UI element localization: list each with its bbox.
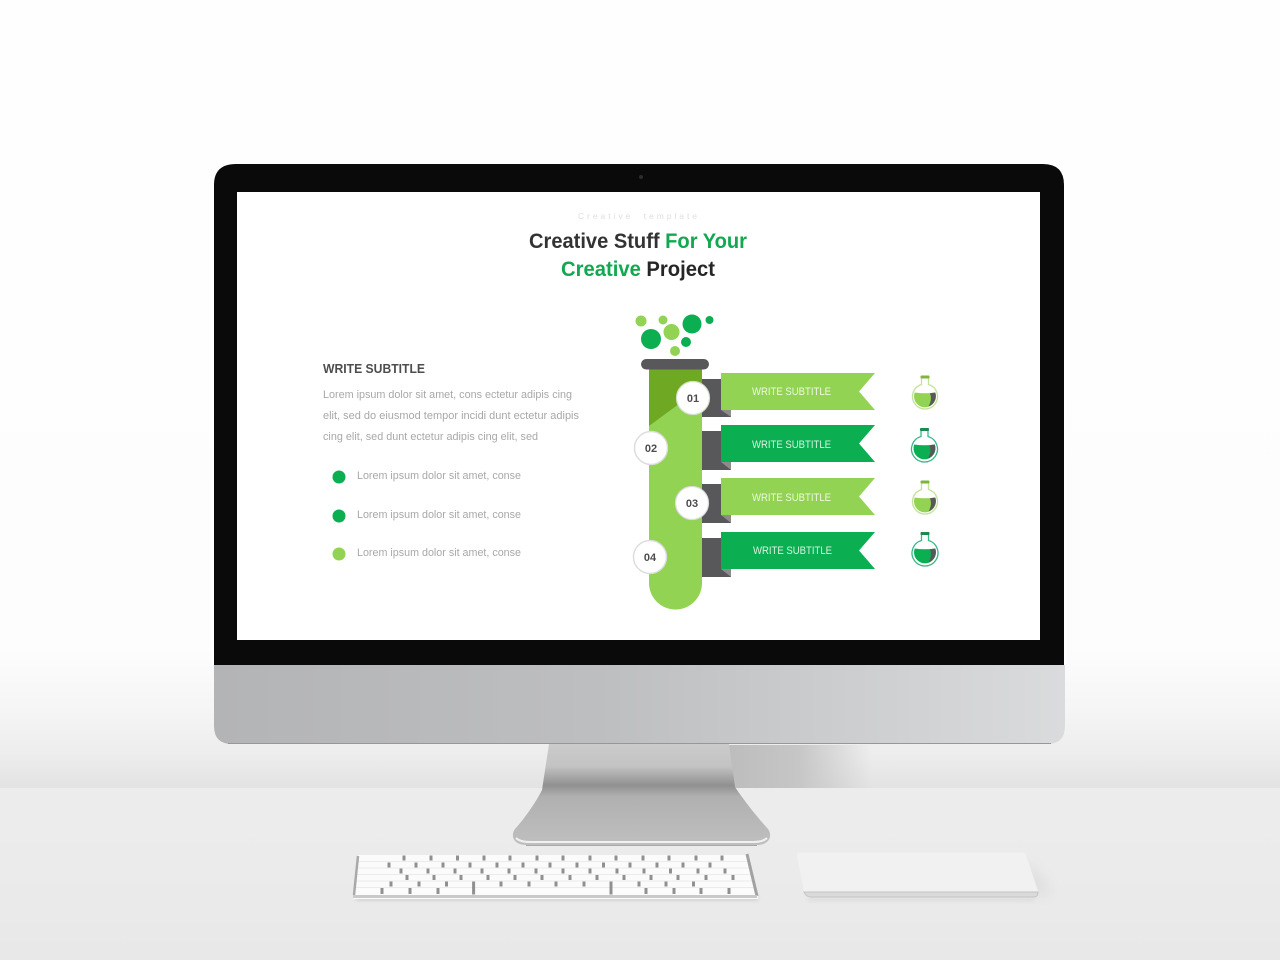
icon: flask 4 xyxy=(912,532,938,566)
trackpad top xyxy=(797,852,1038,894)
bullet list xyxy=(332,470,521,560)
tube shade xyxy=(649,369,702,426)
left column paragraph: cing elit, sed dunt ectetur adipis cing elit, sed xyxy=(323,431,538,443)
screen xyxy=(237,192,1040,640)
keyboard xyxy=(353,854,758,900)
trackpad edge xyxy=(804,892,1038,897)
number badge 02: 02 xyxy=(645,443,657,455)
icon: flask 1 xyxy=(912,376,937,409)
monitor shadow on wall xyxy=(725,745,872,788)
keyboard right edge xyxy=(747,854,757,896)
monitor black bezel xyxy=(214,164,1064,665)
keyboard shadow xyxy=(356,896,758,900)
left column subtitle: WRITE SUBTITLE xyxy=(323,361,425,376)
stand bottom edge xyxy=(526,844,757,846)
ribbon 3: WRITE SUBTITLE xyxy=(752,492,831,504)
key gaps xyxy=(382,856,733,894)
number badge 01 xyxy=(676,382,710,414)
ribbon 4: WRITE SUBTITLE xyxy=(753,545,832,557)
ribbon 2: WRITE SUBTITLE xyxy=(752,439,831,451)
number badge 01: 01 xyxy=(687,393,699,405)
stand rim highlight xyxy=(516,838,767,842)
monitor stand xyxy=(513,744,770,846)
keyboard front edge xyxy=(353,895,757,898)
background: desk xyxy=(0,788,1280,960)
number badge 04 xyxy=(634,540,666,574)
key row separators xyxy=(354,862,755,888)
title line 2: Creative Project xyxy=(561,258,715,281)
eyebrow text: Creative template xyxy=(578,211,697,221)
tube body xyxy=(649,369,702,610)
monitor chin xyxy=(214,665,1065,744)
icon: flask 2 xyxy=(912,428,938,462)
title xyxy=(529,230,747,281)
keyboard body xyxy=(353,855,758,899)
camera xyxy=(639,175,643,179)
left column paragraph: Lorem ipsum dolor sit amet, cons ectetur adipis cing xyxy=(323,389,572,401)
number badge 03: 03 xyxy=(686,498,698,510)
grey ribbon backings xyxy=(702,379,731,577)
number badge 04: 04 xyxy=(644,552,657,564)
ribbon 2 xyxy=(721,425,875,462)
stand body xyxy=(513,744,770,845)
keyboard left edge xyxy=(354,856,358,895)
title line 1: Creative Stuff For Your xyxy=(529,230,747,253)
left column paragraph xyxy=(323,389,579,443)
left column paragraph: elit, sed do eiusmod tempor incidi dunt ectetur adipis xyxy=(323,410,579,422)
tube cap xyxy=(641,359,709,370)
trackpad reflection xyxy=(808,898,1034,901)
chin bottom edge xyxy=(228,742,1051,744)
bullet 2: Lorem ipsum dolor sit amet, conse xyxy=(357,509,521,521)
test tube xyxy=(641,359,709,610)
bullet 3: Lorem ipsum dolor sit amet, conse xyxy=(357,547,521,559)
ribbon 3 xyxy=(721,478,875,515)
monitor halo xyxy=(212,161,1067,665)
trackpad shadow xyxy=(1024,858,1052,894)
bullet 1: Lorem ipsum dolor sit amet, conse xyxy=(357,470,521,482)
number badge 02 xyxy=(634,432,668,464)
bubbles above test tube xyxy=(636,314,714,356)
ribbon 1: WRITE SUBTITLE xyxy=(752,386,831,398)
ribbon 4 xyxy=(721,532,875,569)
ribbon 1 xyxy=(721,373,875,410)
trackpad xyxy=(797,852,1052,901)
icon: flask 3 xyxy=(912,480,938,514)
monitor xyxy=(212,161,1067,744)
number badge 03 xyxy=(676,486,708,520)
